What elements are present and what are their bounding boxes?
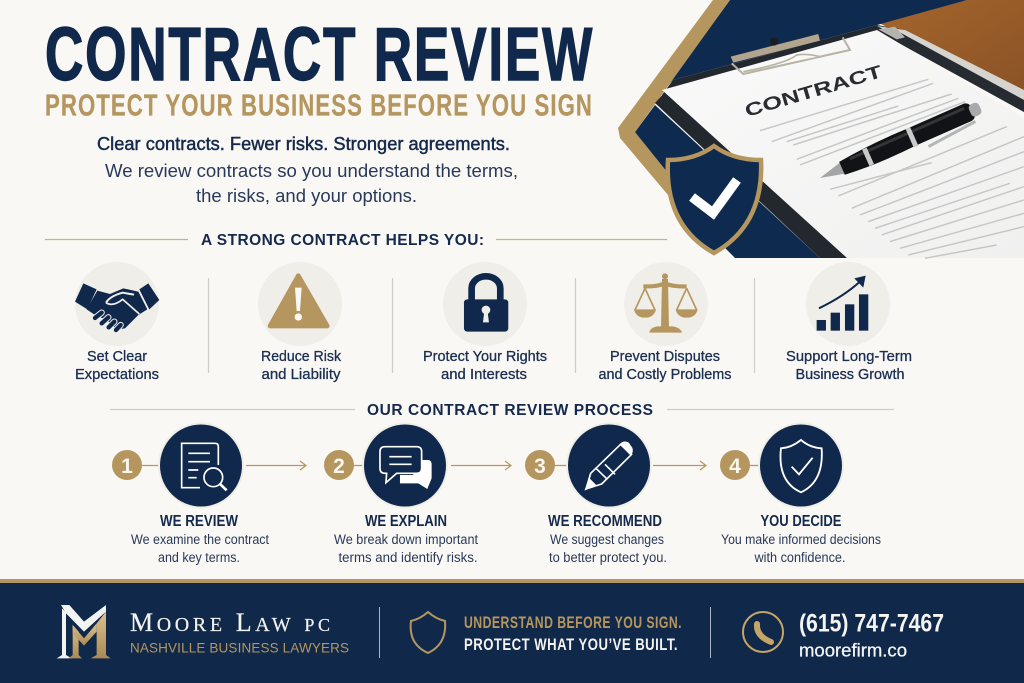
step text: You make informed decisions — [721, 532, 881, 547]
step text: YOU DECIDE — [760, 513, 842, 530]
icon: handshake — [75, 283, 159, 330]
tagline: Clear contracts. Fewer risks. Stronger agreements. — [97, 134, 510, 154]
step 2: we explain — [324, 422, 511, 565]
label: Set Clear — [87, 349, 147, 365]
footer message: UNDERSTAND BEFORE YOU SIGN. — [464, 614, 682, 632]
number badge: 1 — [121, 455, 133, 478]
label: and Costly Problems — [598, 367, 732, 383]
icon: shield outline — [411, 612, 445, 653]
icon: document with magnifier — [158, 422, 244, 508]
hero photo: contract on clipboard — [618, 0, 1024, 258]
number badge — [720, 450, 750, 480]
label: Reduce Risk — [261, 349, 342, 365]
section heading: benefits: A STRONG CONTRACT HELPS YOU: — [201, 232, 484, 249]
label: Support Long-Term — [786, 349, 912, 365]
section heading: process: OUR CONTRACT REVIEW PROCESS — [367, 402, 653, 419]
firm tagline: NASHVILLE BUSINESS LAWYERS — [130, 641, 349, 656]
step text: We examine the contract — [131, 532, 269, 547]
icon: growth chart — [817, 276, 868, 331]
icon: shield check — [758, 422, 844, 508]
shield badge with check — [668, 146, 761, 253]
title: CONTRACT REVIEW — [45, 12, 594, 96]
icon: chat bubbles — [362, 422, 448, 508]
step text: and key terms. — [158, 550, 240, 565]
icon: padlock — [464, 276, 508, 332]
pen — [816, 98, 986, 192]
step text: We break down important — [334, 532, 478, 547]
arrow — [246, 461, 306, 470]
footer band — [0, 579, 1024, 683]
icon: scales of justice — [634, 273, 698, 333]
label — [75, 349, 159, 383]
label: Protect Your Rights — [423, 349, 547, 365]
label: and Interests — [441, 367, 527, 383]
footer message: PROTECT WHAT YOU’VE BUILT. — [464, 636, 678, 654]
number badge: 2 — [333, 455, 345, 478]
step text — [548, 513, 667, 565]
label: Expectations — [75, 367, 159, 383]
website: moorefirm.co — [799, 640, 907, 661]
benefit: protect rights — [423, 262, 547, 383]
number badge — [324, 450, 354, 480]
benefit: set clear expectations — [75, 262, 159, 383]
step text: to better protect you. — [549, 550, 667, 565]
label: and Liability — [262, 367, 341, 383]
step 1: we review — [112, 422, 306, 565]
number badge: 3 — [534, 455, 546, 478]
label — [598, 349, 732, 383]
step 3: we recommend — [525, 422, 706, 565]
benefit: reduce risk — [258, 262, 342, 383]
step text — [334, 513, 478, 565]
icon: phone — [743, 612, 783, 652]
number badge: 4 — [729, 455, 741, 478]
step text: WE RECOMMEND — [548, 513, 662, 530]
phone number: (615) 747-7467 — [799, 610, 944, 638]
footer message — [464, 614, 682, 654]
label — [423, 349, 547, 383]
step text — [721, 513, 881, 565]
arrow — [451, 461, 511, 470]
arrow — [653, 461, 706, 470]
step text — [131, 513, 269, 565]
label: Business Growth — [796, 367, 904, 383]
icon: pencil — [566, 422, 652, 508]
paper text lines — [760, 79, 1024, 258]
firm name: MOORE LAW PC — [130, 608, 330, 637]
step text: terms and identify risks. — [338, 550, 478, 565]
step text: WE EXPLAIN — [365, 513, 447, 530]
intro text — [105, 161, 518, 206]
intro text: the risks, and your options. — [196, 186, 417, 206]
label: Prevent Disputes — [610, 349, 720, 365]
step 4: you decide — [720, 422, 881, 565]
benefit: prevent disputes — [598, 262, 732, 383]
contract heading: CONTRACT — [742, 61, 884, 121]
clipboard clip — [731, 27, 905, 74]
step text: with confidence. — [754, 550, 846, 565]
number badge — [525, 450, 555, 480]
benefit: long-term growth — [786, 262, 912, 383]
label — [261, 349, 342, 383]
contract paper — [662, 30, 1024, 258]
logo: M monogram — [57, 605, 111, 658]
subtitle: PROTECT YOUR BUSINESS BEFORE YOU SIGN — [45, 88, 593, 122]
icon: warning triangle — [270, 276, 327, 326]
number badge — [112, 450, 142, 480]
intro text: We review contracts so you understand the terms, — [105, 161, 518, 181]
label — [786, 349, 912, 383]
step text: WE REVIEW — [160, 513, 238, 530]
step text: We suggest changes — [550, 532, 664, 547]
